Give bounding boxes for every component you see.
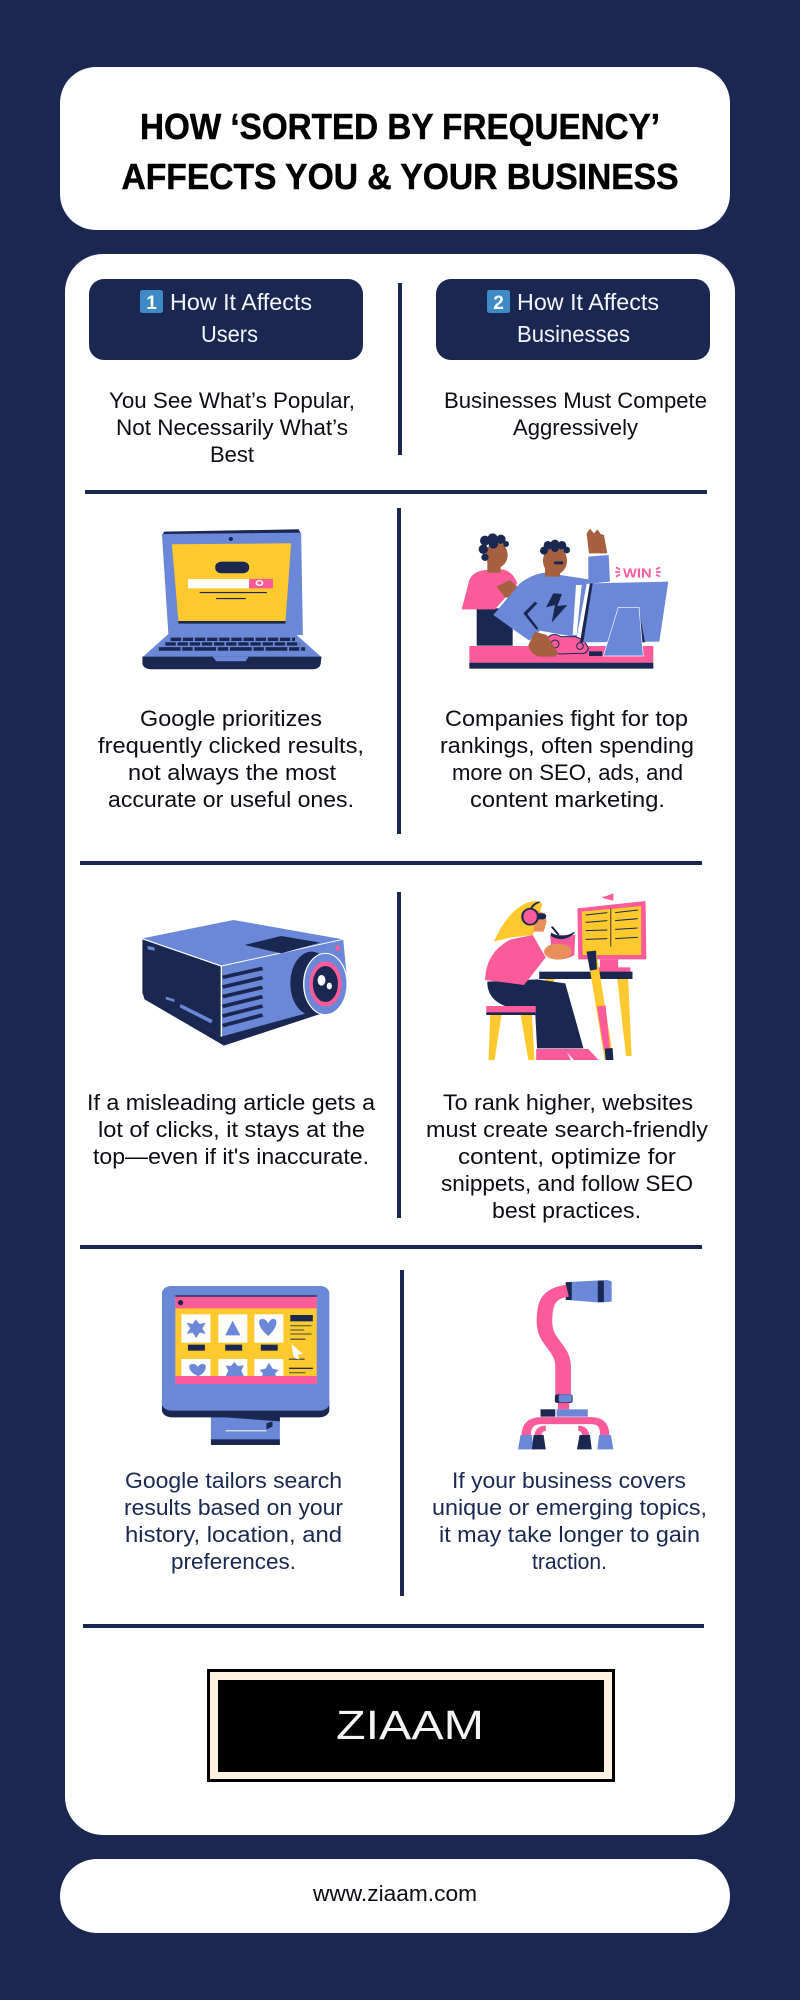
text: companies fight: content marketing.: [470, 787, 665, 812]
text: unique topics: traction.: [532, 1549, 607, 1574]
button: how it affects users: How It Affects: [170, 289, 312, 315]
title text: [122, 106, 678, 197]
text: misleading article: top—even if it's inaccurate.: [93, 1144, 369, 1169]
text: rank higher: must create search-friendly: [426, 1117, 708, 1142]
footer pill: [60, 1859, 730, 1933]
title card: [60, 67, 730, 230]
subheading: users: Not Necessarily What’s: [116, 415, 348, 440]
title text: AFFECTS YOU & YOUR BUSINESS: [122, 156, 678, 197]
text: companies fight: rankings, often spending: [440, 733, 694, 758]
button: how it affects businesses: How It Affects: [517, 289, 659, 315]
footer url: www.ziaam.com: [312, 1881, 477, 1906]
button: how it affects businesses: 2: [493, 293, 504, 314]
text: unique topics: [432, 1468, 707, 1574]
label: WIN: WIN: [623, 566, 652, 580]
button: how it affects users: 1: [146, 293, 157, 314]
icon: gamers at a computer: [462, 529, 668, 669]
text: google tailors: Google tailors search: [125, 1468, 342, 1493]
text: google prioritizes: [98, 706, 364, 812]
subheading: users: Best: [210, 442, 254, 467]
text: unique topics: If your business covers: [452, 1468, 686, 1493]
title text: HOW ‘SORTED BY FREQUENCY’: [140, 106, 660, 147]
text: google prioritizes: frequently clicked results,: [98, 733, 364, 758]
subheading: businesses: [444, 388, 707, 440]
text: google tailors: results based on your: [124, 1495, 343, 1520]
text: companies fight: [440, 706, 694, 812]
text: rank higher: To rank higher, websites: [443, 1090, 693, 1115]
text: google tailors: history, location, and: [125, 1522, 342, 1547]
text: google prioritizes: Google prioritizes: [140, 706, 322, 731]
icon: quad walking cane: [518, 1280, 613, 1449]
text: misleading article: lot of clicks, it stays at the: [98, 1117, 365, 1142]
text: misleading article: If a misleading article gets a: [87, 1090, 376, 1115]
icon: laptop: [142, 529, 322, 669]
text: misleading article: [87, 1090, 376, 1169]
text: rank higher: content, optimize for: [458, 1144, 676, 1169]
subheading: businesses: Aggressively: [513, 415, 638, 440]
text: companies fight: more on SEO, ads, and: [452, 760, 683, 785]
icon: desktop monitor: [162, 1286, 329, 1445]
text: google prioritizes: not always the most: [128, 760, 336, 785]
logo: ZIAAM: ZIAAM: [336, 1702, 484, 1748]
icon: woman using a computer: [485, 893, 646, 1060]
button: how it affects businesses: [436, 279, 710, 360]
button: how it affects users: Users: [201, 321, 258, 347]
text: rank higher: snippets, and follow SEO: [441, 1171, 693, 1196]
text: google tailors: preferences.: [171, 1549, 296, 1574]
button: how it affects businesses: Businesses: [517, 321, 630, 347]
text: google tailors: [124, 1468, 343, 1574]
text: rank higher: best practices.: [492, 1198, 641, 1223]
button: how it affects users: [89, 279, 363, 360]
icon: projector: [142, 920, 347, 1046]
logo: ZIAAM: [207, 1669, 615, 1782]
panel: main content card: [65, 254, 735, 1835]
subheading: users: [109, 388, 355, 467]
text: rank higher: [426, 1090, 708, 1223]
text: companies fight: Companies fight for top: [445, 706, 688, 731]
subheading: users: You See What’s Popular,: [109, 388, 355, 413]
subheading: businesses: Businesses Must Compete: [444, 388, 707, 413]
text: unique topics: it may take longer to gain: [439, 1522, 700, 1547]
text: google prioritizes: accurate or useful ones.: [108, 787, 354, 812]
text: unique topics: unique or emerging topics,: [432, 1495, 707, 1520]
